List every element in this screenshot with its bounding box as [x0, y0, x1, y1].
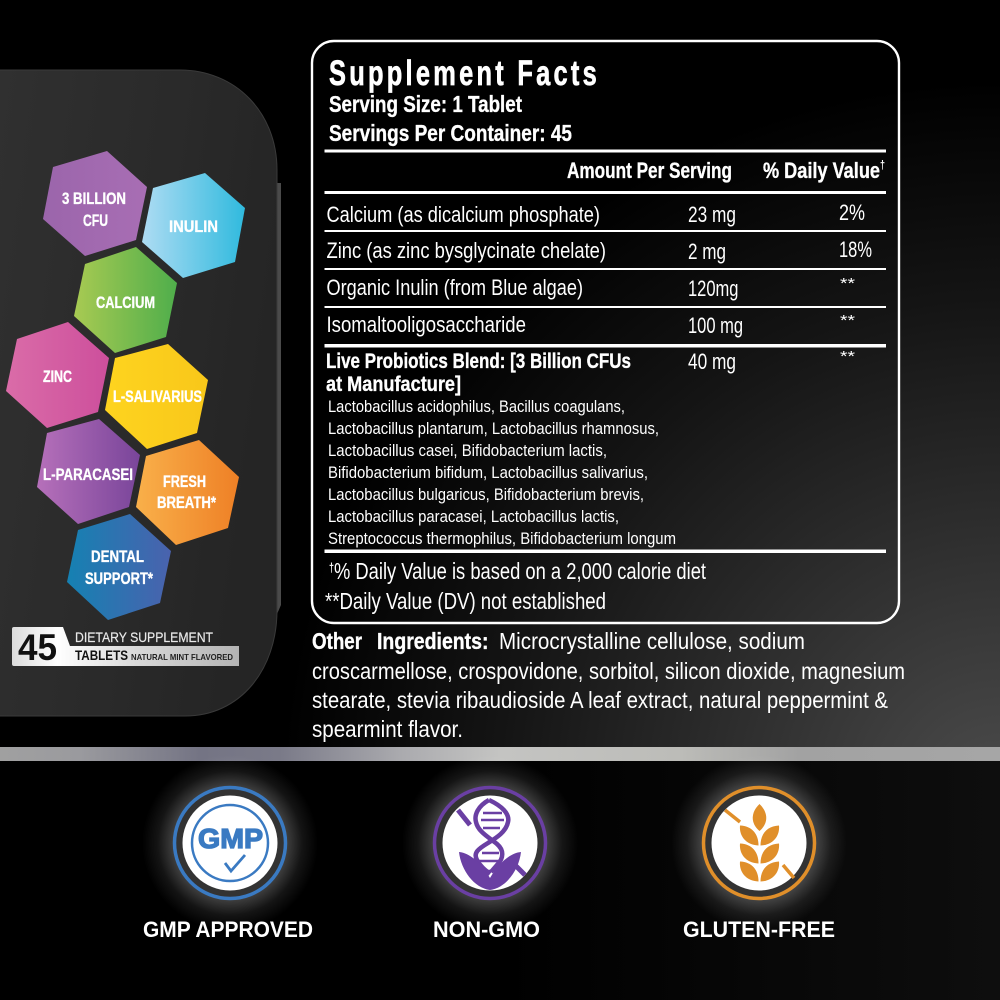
row: zinc: 18% — [839, 237, 872, 262]
other ingredients text — [312, 628, 905, 742]
hexagon: inulin: INULIN — [169, 217, 218, 236]
icon: gluten-free — [671, 755, 847, 931]
hexagon: dental support — [67, 514, 171, 620]
probiotic strains list — [328, 397, 676, 548]
hexagon: zinc: ZINC — [43, 367, 72, 386]
tablet count badge: 45 — [18, 627, 57, 668]
footnotes: **Daily Value (DV) not established — [325, 588, 606, 614]
row: live probiotics blend: Live Probiotics Blend: [3 Billion CFUs — [326, 350, 631, 373]
icon: GMP approved — [142, 755, 318, 931]
row: isomaltooligosaccharide: Isomaltooligosaccharide — [326, 312, 526, 337]
hexagon: fresh breath: BREATH* — [157, 493, 216, 512]
row: zinc — [326, 237, 872, 264]
probiotic strains list: Streptococcus thermophilus, Bifidobacterium longum — [328, 529, 676, 548]
hexagon: 3 billion CFU: CFU — [83, 211, 108, 230]
hexagon: zinc — [6, 322, 109, 428]
hexagon: 3 billion CFU — [43, 151, 147, 256]
row: calcium: 2% — [839, 200, 865, 225]
row: calcium: 23 mg — [688, 202, 736, 227]
icon: GMP approved: GMP — [198, 823, 263, 854]
row: organic inulin: ** — [840, 275, 855, 292]
hexagon: calcium: CALCIUM — [96, 293, 155, 312]
label: GMP approved: GMP APPROVED — [143, 917, 313, 942]
hexagon: fresh breath — [136, 440, 239, 545]
row: calcium: Calcium (as dicalcium phosphate) — [326, 202, 600, 227]
other ingredients text: stearate, stevia ribaudioside A leaf extract, natural peppermint & — [312, 687, 888, 713]
tin side ridge — [270, 183, 281, 630]
hexagon: L-paracasei — [37, 419, 140, 524]
tin body — [0, 70, 277, 716]
tablet count badge — [12, 627, 239, 668]
serving information — [329, 91, 572, 146]
heading: Supplement Facts — [329, 54, 600, 93]
probiotic strains list: Bifidobacterium bifidum, Lactobacillus salivarius, — [328, 463, 648, 482]
column headers: Amount Per Serving — [567, 158, 732, 183]
footnotes: % Daily Value is based on a 2,000 calorie diet — [334, 558, 706, 584]
column headers: † — [880, 158, 885, 172]
row: isomaltooligosaccharide: 100 mg — [688, 313, 743, 338]
hexagon: L-salivarius: L-SALIVARIUS — [113, 387, 202, 406]
row: live probiotics blend: ** — [840, 348, 855, 365]
row: isomaltooligosaccharide: ** — [840, 312, 855, 329]
row: organic inulin: Organic Inulin (from Blue algae) — [326, 275, 583, 300]
column headers: % Daily Value — [763, 158, 880, 183]
hexagon: L-paracasei: L-PARACASEI — [43, 465, 133, 484]
hexagon: 3 billion CFU: 3 BILLION — [62, 189, 126, 208]
other ingredients text: Microcrystalline cellulose, sodium — [499, 628, 805, 654]
probiotic strains list: Lactobacillus paracasei, Lactobacillus lactis, — [328, 507, 619, 526]
icon: non-GMO — [402, 755, 578, 931]
probiotic strains list: Lactobacillus plantarum, Lactobacillus rhamnosus, — [328, 419, 659, 438]
hexagon: fresh breath: FRESH — [163, 472, 206, 491]
hexagon: calcium — [74, 247, 177, 353]
row: zinc: Zinc (as zinc bysglycinate chelate) — [326, 238, 606, 263]
label: gluten-free: GLUTEN-FREE — [683, 917, 835, 942]
other ingredients text: spearmint flavor. — [312, 716, 463, 742]
hexagon: dental support: SUPPORT* — [85, 569, 153, 588]
serving information: Serving Size: 1 Tablet — [329, 91, 522, 117]
column headers — [567, 158, 885, 183]
probiotic strains list: Lactobacillus casei, Bifidobacterium lactis, — [328, 441, 607, 460]
label: non-GMO: NON-GMO — [433, 917, 540, 942]
hexagon: dental support: DENTAL — [91, 547, 144, 566]
row: live probiotics blend — [326, 348, 855, 396]
serving information: Servings Per Container: 45 — [329, 120, 572, 146]
other ingredients text: Ingredients: — [377, 628, 488, 654]
probiotic strains list: Lactobacillus bulgaricus, Bifidobacterium brevis, — [328, 485, 644, 504]
row: organic inulin — [326, 275, 855, 301]
hexagon: inulin — [142, 173, 245, 278]
footnotes: † — [329, 560, 334, 575]
row: live probiotics blend: 40 mg — [688, 349, 736, 374]
tablet count badge: DIETARY SUPPLEMENT — [75, 630, 213, 645]
metallic divider bar — [0, 747, 1000, 761]
panel: supplement facts — [312, 41, 899, 623]
footnotes — [325, 558, 706, 614]
row: zinc: 2 mg — [688, 239, 726, 264]
tablet count badge: NATURAL MINT FLAVORED — [131, 652, 233, 662]
other ingredients text: croscarmellose, crospovidone, sorbitol, silicon dioxide, magnesium — [312, 658, 905, 684]
probiotic strains list: Lactobacillus acidophilus, Bacillus coagulans, — [328, 397, 625, 416]
other ingredients text: Other — [312, 628, 362, 654]
tablet count badge: TABLETS — [75, 648, 128, 663]
product tin — [0, 70, 281, 716]
row: calcium — [326, 200, 865, 227]
row: isomaltooligosaccharide — [326, 312, 855, 338]
row: organic inulin: 120mg — [688, 276, 738, 301]
row: live probiotics blend: at Manufacture] — [326, 373, 461, 396]
hexagon: L-salivarius — [105, 344, 208, 449]
